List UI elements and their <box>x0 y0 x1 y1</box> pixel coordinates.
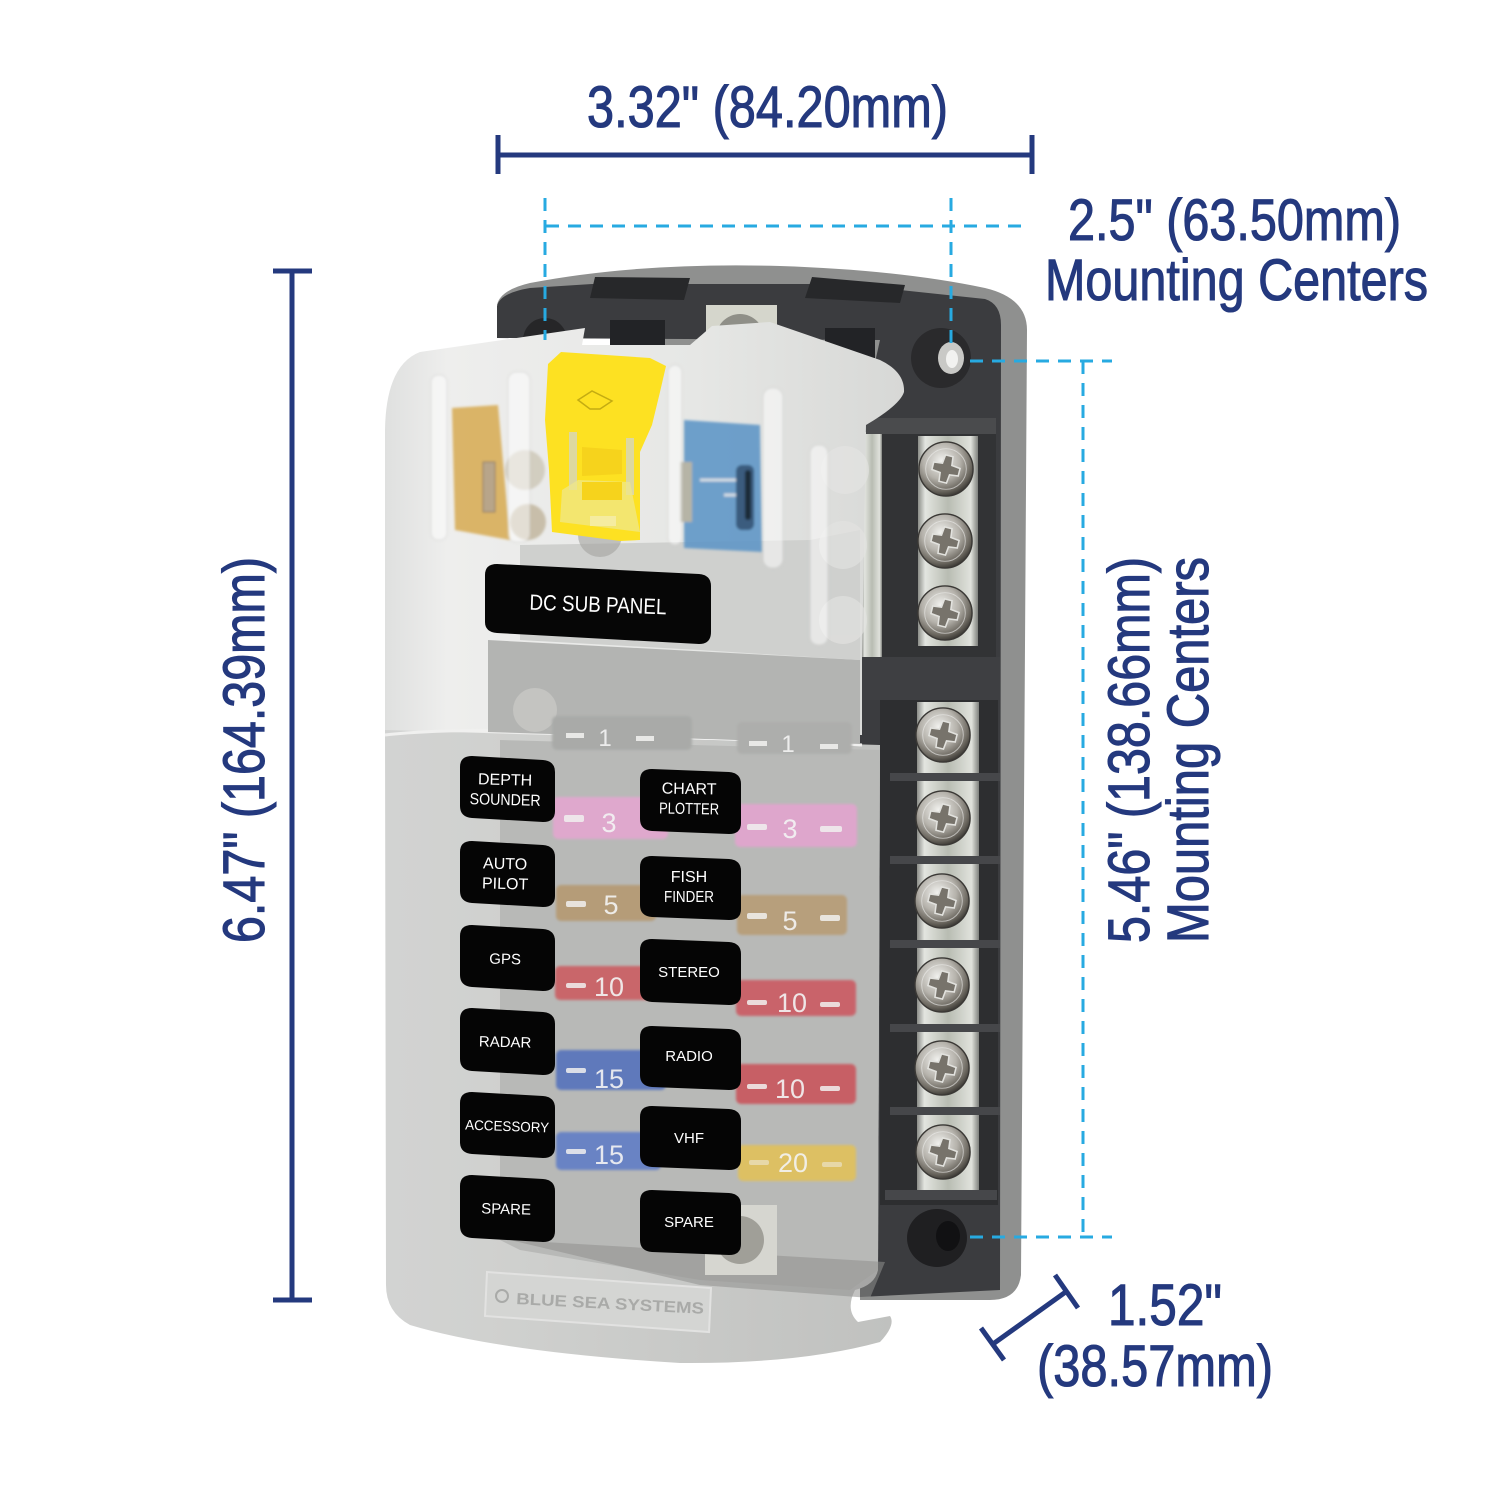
label: SPARE: SPARE <box>481 1200 531 1219</box>
label: VHF: VHF <box>674 1130 704 1147</box>
dimension: depth: (38.57mm) <box>1037 1334 1273 1399</box>
fuse 10 red: 10 <box>777 988 807 1018</box>
dimension: width <box>498 75 1032 174</box>
top mounting hole <box>911 328 971 388</box>
label: RADIO <box>640 1026 741 1090</box>
dimension: height: 6.47" (164.39mm) <box>212 557 277 943</box>
bottom mounting hole <box>907 1209 967 1267</box>
label: GPS <box>460 925 555 991</box>
fuse 10 red: 10 <box>594 972 624 1002</box>
label: DEPTH SOUNDER: DEPTH <box>478 771 532 790</box>
label: STEREO: STEREO <box>658 964 720 981</box>
label: SPARE <box>640 1190 741 1255</box>
fuse 5 orange: 5 <box>782 906 798 936</box>
label: AUTO PILOT: AUTO <box>483 855 527 874</box>
label: DEPTH SOUNDER <box>460 756 555 822</box>
fuse 10 red <box>555 966 660 1002</box>
label: CHART PLOTTER: CHART <box>662 781 717 798</box>
label: ACCESSORY <box>460 1092 555 1158</box>
dimension: mounting centers vertical: 5.46" (138.66mm) <box>1097 557 1162 943</box>
fuse 15 blue: 15 <box>594 1064 624 1094</box>
dimension: depth: 1.52" <box>1108 1273 1222 1338</box>
label: AUTO PILOT: PILOT <box>482 875 529 894</box>
fuse 20 yellow: 20 <box>778 1148 808 1178</box>
dimension: height <box>212 271 312 1300</box>
fuse 10 red: 10 <box>775 1074 805 1104</box>
label: CHART PLOTTER: PLOTTER <box>659 800 719 819</box>
label: STEREO <box>640 939 741 1005</box>
label: DEPTH SOUNDER: SOUNDER <box>469 791 541 810</box>
dimension: mounting centers vertical <box>1097 557 1221 943</box>
brand plate <box>485 1272 711 1332</box>
top stud <box>706 305 777 362</box>
fuse 5 orange <box>556 885 656 921</box>
dimension: mounting centers vertical: Mounting Centers <box>1156 557 1221 943</box>
dimension: mounting centers horizontal: 2.5" (63.50mm) <box>1068 188 1401 253</box>
label: CHART PLOTTER <box>640 769 741 834</box>
brand plate: BLUE SEA SYSTEMS <box>516 1291 705 1318</box>
fuse 10 red <box>736 980 856 1018</box>
DC SUB PANEL label: DC SUB PANEL <box>529 590 667 619</box>
fuse 3 pink <box>735 804 857 847</box>
fuse 15 blue: 15 <box>594 1140 624 1170</box>
label: VHF <box>640 1106 741 1170</box>
fuse 3 pink: 3 <box>782 814 798 844</box>
label: RADAR: RADAR <box>479 1033 532 1052</box>
dimension: mounting centers horizontal: Mounting Centers <box>1045 248 1428 313</box>
screws lower <box>915 708 970 1179</box>
label: GPS: GPS <box>489 951 521 968</box>
fuse 3 pink: 3 <box>601 808 617 838</box>
inner body lower <box>500 740 880 1290</box>
fuse 15 blue <box>556 1050 666 1094</box>
amber maxi fuse <box>452 405 546 540</box>
label: ACCESSORY: ACCESSORY <box>465 1117 550 1135</box>
inner body upper <box>488 640 860 744</box>
label: SPARE: SPARE <box>664 1214 714 1231</box>
label: FISH FINDER <box>640 856 741 920</box>
fuse 20 yellow <box>738 1145 856 1181</box>
label: RADIO: RADIO <box>665 1048 713 1065</box>
yellow clip <box>545 352 666 541</box>
dimension: width: 3.32" (84.20mm) <box>587 75 948 140</box>
label: FISH FINDER: FISH <box>671 869 707 886</box>
clear cover <box>385 322 904 1363</box>
terminal block lower <box>880 700 1000 1205</box>
label: FISH FINDER: FINDER <box>664 889 714 906</box>
DC SUB PANEL label <box>485 564 711 644</box>
label: RADAR <box>460 1008 555 1075</box>
fuses rating 1: 1 <box>781 731 795 758</box>
ghost screws under cover <box>513 446 869 732</box>
fuse 10 red <box>736 1064 856 1104</box>
terminal block upper <box>860 418 1000 700</box>
fuses right column <box>735 804 857 1181</box>
screws upper <box>918 442 973 640</box>
fuses left column <box>553 797 668 1170</box>
base plate <box>497 265 1027 1300</box>
dimension: mounting centers horizontal <box>1045 188 1428 313</box>
fuse 3 pink <box>553 797 668 839</box>
dimension: depth <box>981 1273 1273 1399</box>
fuses rating 1: 1 <box>598 725 612 752</box>
fuse 5 orange: 5 <box>603 890 619 920</box>
blue maxi fuse <box>680 420 762 552</box>
label: SPARE <box>460 1175 555 1242</box>
fuse 15 blue <box>556 1132 661 1170</box>
fuses rating 1 <box>552 716 852 758</box>
cover ribs <box>431 365 828 645</box>
dashed lines: mounting centers <box>545 198 1112 1237</box>
label: AUTO PILOT <box>460 841 555 907</box>
fuse 5 orange <box>737 895 847 936</box>
